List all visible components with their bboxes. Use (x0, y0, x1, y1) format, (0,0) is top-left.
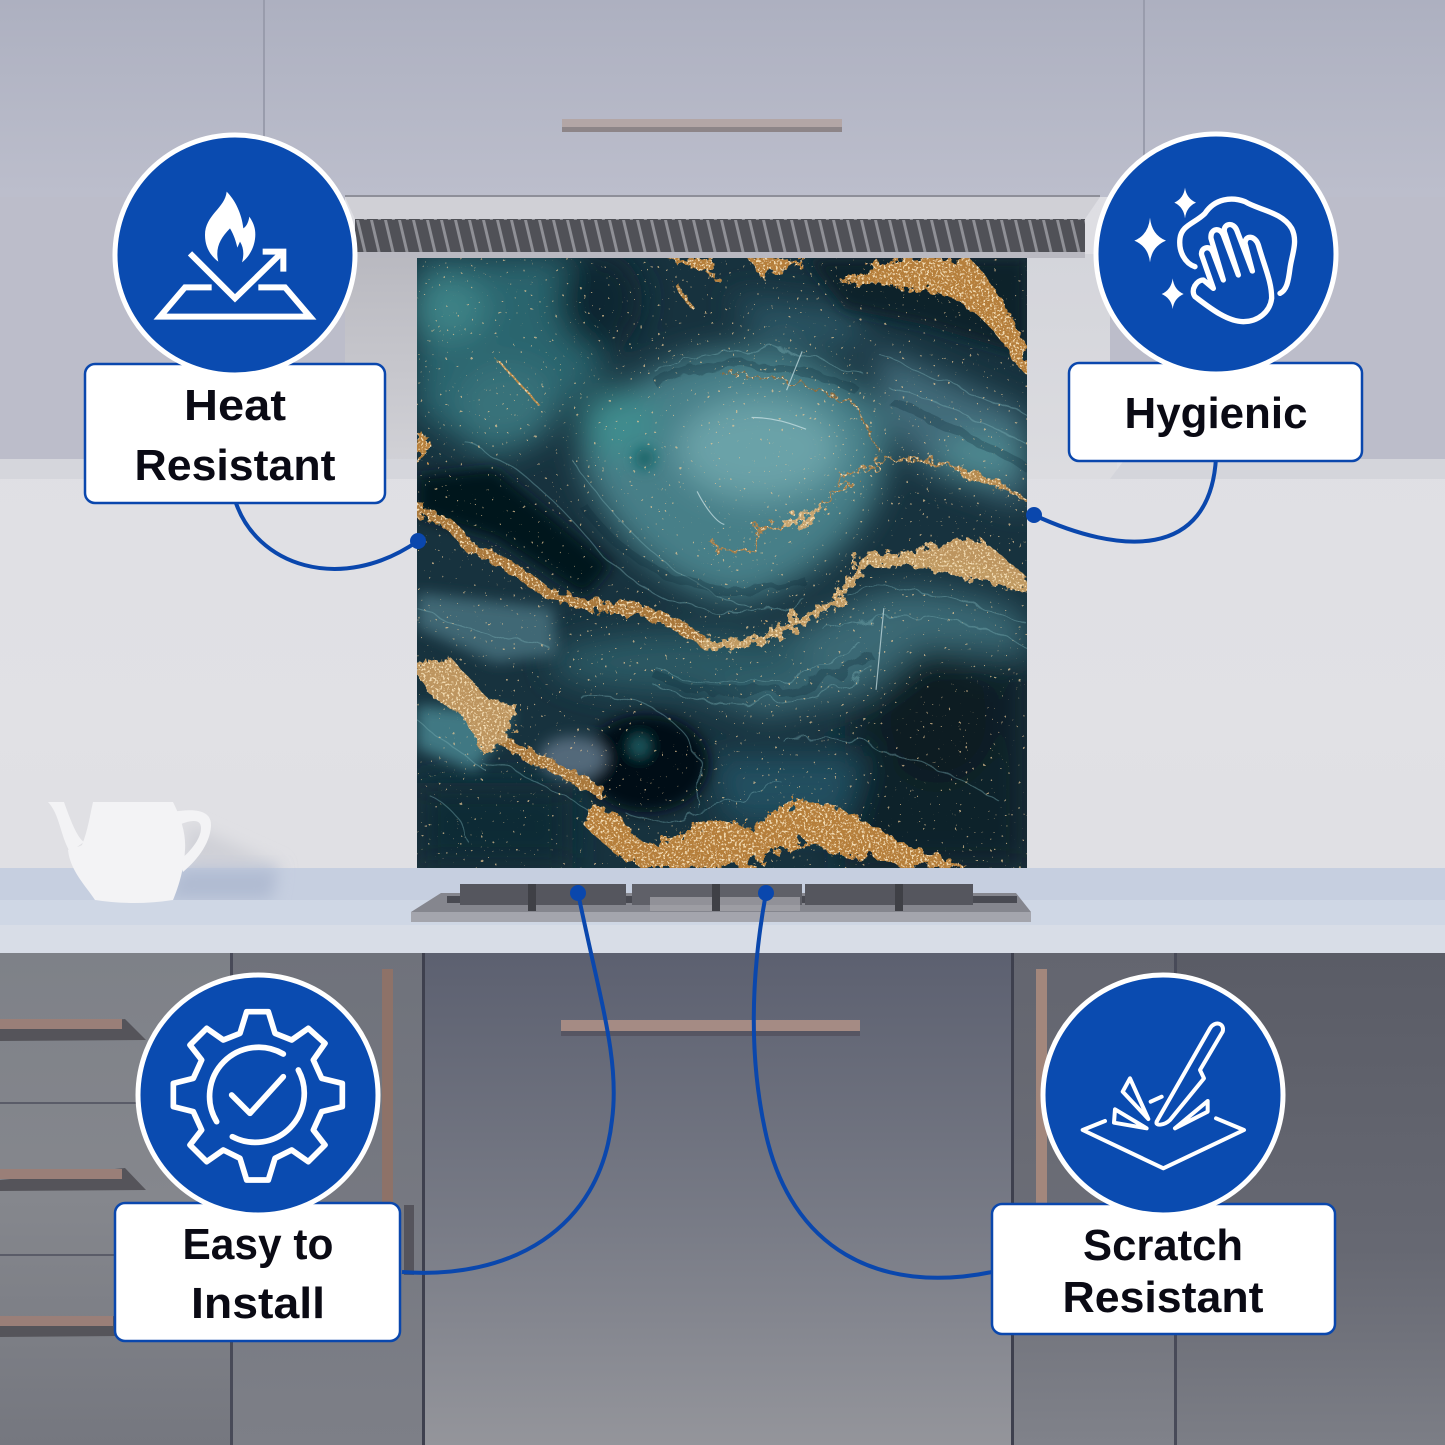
badge: scratch resistant (1043, 975, 1283, 1215)
connector: hygienic (1026, 458, 1216, 542)
connector: heat resistant (235, 500, 426, 569)
cooktop (411, 884, 1031, 922)
teapot (48, 802, 211, 903)
handles (0, 969, 1047, 1337)
badge: hygienic (1096, 134, 1336, 374)
lower cabinets (0, 953, 1445, 1445)
label: easy to install: Easy to (182, 1221, 334, 1269)
label: heat resistant: Resistant (134, 442, 336, 490)
badge: heat resistant (115, 135, 355, 375)
countertop (0, 825, 1445, 953)
upper cabinets (0, 0, 1445, 479)
label: scratch resistant (992, 1204, 1335, 1334)
icon: hand wiping with sparkles (1134, 188, 1295, 322)
label: heat resistant: Heat (184, 382, 286, 430)
label: easy to install: Install (191, 1280, 325, 1328)
label: scratch resistant: Scratch (1083, 1222, 1243, 1270)
sharper marble shapes (417, 258, 1027, 812)
marble colour masses (409, 250, 1027, 868)
label: easy to install (115, 1203, 400, 1341)
range hood (345, 195, 1100, 258)
label: hygienic: Hygienic (1124, 390, 1308, 438)
gold specks (417, 258, 1027, 868)
label: scratch resistant: Resistant (1062, 1274, 1264, 1322)
icon: gear with check (173, 1012, 342, 1180)
white cracks (697, 351, 884, 690)
broad tonal bands (584, 364, 1027, 693)
connector: easy to install (402, 885, 614, 1273)
banded veins (417, 350, 1027, 842)
icon: knife scratching surface (1083, 1024, 1244, 1168)
connector: scratch resistant (754, 885, 992, 1278)
badge: easy to install (138, 975, 378, 1215)
gold veins (417, 258, 1027, 868)
icon: flame over surface (160, 192, 310, 317)
label: heat resistant (85, 364, 385, 503)
label: hygienic (1069, 363, 1362, 461)
marble backsplash panel (409, 250, 1027, 868)
